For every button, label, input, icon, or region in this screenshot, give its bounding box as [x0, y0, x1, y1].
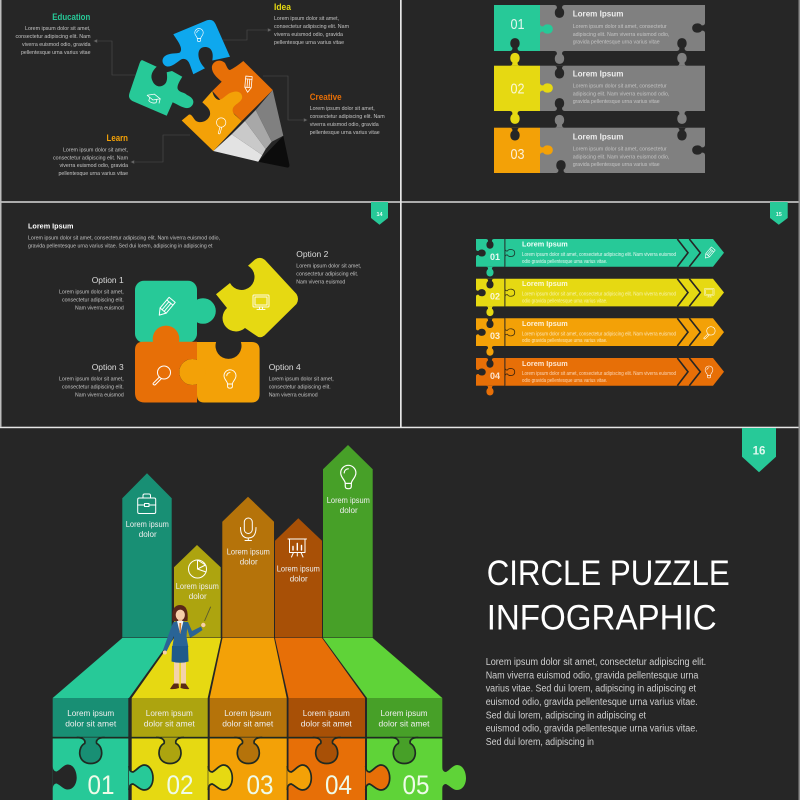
text: idea: consectetur adipiscing elit. Nam — [274, 24, 349, 30]
arrow row 01 — [476, 239, 724, 276]
side knob amber — [287, 765, 311, 790]
arrow row 02 — [476, 279, 724, 316]
icon: microphone — [240, 518, 256, 540]
text: learn: consectetur adipiscing elit. Nam — [53, 156, 128, 162]
text: creative: viverra euismod odio, gravida — [310, 122, 379, 128]
arrow row 01: odio gravida pellentesque urna varius vitae. — [522, 259, 607, 265]
text: education: pellentesque urna varius vitae — [21, 50, 90, 56]
arrow row 02: odio gravida pellentesque urna varius vitae. — [522, 298, 607, 304]
puzzle numbers: 04 — [325, 770, 352, 800]
text: idea: Lorem ipsum dolor sit amet, — [274, 16, 339, 22]
front face labels — [65, 708, 430, 729]
arrow row 03: odio gravida pellentesque urna varius vitae. — [522, 338, 607, 344]
arrow row 04 — [476, 358, 724, 395]
page tag 14: 14 — [376, 212, 383, 218]
arrow labels: dolor — [189, 591, 207, 601]
arrow labels: dolor — [240, 556, 258, 566]
arrow labels: dolor — [340, 505, 358, 515]
icon: lightbulb — [195, 28, 203, 42]
icon: graduation cap — [146, 92, 161, 105]
puzzle piece: orange — [135, 326, 197, 402]
text: learn: pellentesque urna varius vitae — [58, 171, 128, 177]
icon: presentation board — [288, 539, 306, 557]
number 02: 02 — [510, 80, 524, 98]
body paragraph: euismod odio, gravida pellentesque urna varius vitae. — [486, 724, 698, 735]
arrow row 01: Lorem Ipsum — [522, 240, 568, 248]
option 1: Option 1 — [92, 275, 124, 285]
arrow row 01: Lorem ipsum dolor sit amet, consectetur adipiscing elit. Nam viverra euismod — [522, 252, 676, 258]
icon: pencil — [244, 76, 252, 93]
puzzle numbers: 03 — [246, 770, 274, 800]
puzzle numbers: 01 — [88, 770, 114, 800]
puzzle piece: teal — [135, 281, 216, 343]
number 01: 01 — [510, 16, 524, 33]
page tag 14 — [371, 202, 388, 225]
text: row 2: Lorem Ipsum — [573, 69, 623, 78]
arrow labels: Lorem ipsum — [176, 581, 219, 591]
text: row 3 — [573, 132, 670, 168]
puzzle numbers: 02 — [166, 770, 194, 800]
body paragraph: Sed dui lorem, adipiscing in — [486, 737, 594, 748]
arrow row 02: Lorem ipsum dolor sit amet, consectetur adipiscing elit. Nam viverra euismod — [522, 292, 676, 298]
text: row 1: gravida pellentesque urna varius vitae — [573, 40, 660, 46]
title: CIRCLE PUZZLE — [487, 554, 730, 593]
option 1: consectetur adipiscing elit. — [62, 298, 124, 304]
row 2 — [494, 53, 705, 124]
arrow 4 — [275, 518, 322, 638]
panel: numbered puzzle rows — [494, 5, 705, 173]
panel: circle puzzle main slide — [52, 428, 776, 800]
text: education: Lorem ipsum dolor sit amet, — [25, 26, 91, 32]
notch in piece 1 — [53, 764, 77, 790]
arrow row 02: 02 — [490, 292, 500, 302]
page tag 16 — [742, 428, 776, 472]
option 2: consectetur adipiscing elit. — [296, 272, 358, 278]
text: education — [16, 12, 91, 56]
body paragraph: Sed dui lorem, adipiscing in adipiscing et — [486, 710, 646, 721]
text: creative — [310, 92, 385, 136]
top knob 1 — [77, 738, 105, 764]
connector lines — [94, 28, 307, 164]
puzzle numbers: 05 — [402, 770, 430, 800]
number 03: 03 — [510, 146, 524, 163]
title — [487, 554, 730, 637]
text: learn: Learn — [106, 133, 128, 143]
text: row 2: adipiscing elit. Nam viverra euismod odio, — [573, 92, 670, 98]
option 2 — [296, 249, 362, 285]
text: learn — [53, 133, 128, 177]
option 4: consectetur adipiscing elit. — [269, 385, 331, 391]
arrow 2 — [174, 545, 221, 638]
text: row 1: adipiscing elit. Nam viverra euismod odio, — [573, 32, 670, 38]
arrow row 03: Lorem ipsum dolor sit amet, consectetur adipiscing elit. Nam viverra euismod — [522, 331, 676, 337]
text: education: Education — [52, 12, 90, 22]
text: row 2: Lorem ipsum dolor sit amet, consectetur — [573, 84, 667, 90]
option 1 — [59, 275, 124, 311]
text: idea: Idea — [274, 2, 292, 12]
side knob yellow — [208, 765, 232, 790]
option 3: consectetur adipiscing elit. — [62, 385, 124, 391]
text: idea: viverra euismod odio, gravida — [274, 32, 343, 38]
arrow labels: Lorem ipsum — [277, 564, 320, 574]
puzzle base pieces — [52, 737, 466, 800]
arrow row 04: Lorem Ipsum — [522, 359, 568, 368]
side knob orange — [366, 765, 390, 790]
text: row 3: adipiscing elit. Nam viverra euismod odio, — [573, 154, 670, 160]
option 2: Nam viverra euismod — [296, 279, 345, 285]
text: row 3: Lorem ipsum dolor sit amet, consectetur — [573, 146, 667, 152]
arrow row 02: Lorem Ipsum — [522, 279, 568, 288]
text: idea: pellentesque urna varius vitae — [274, 40, 344, 46]
arrow labels: dolor — [139, 529, 157, 539]
option 3 — [59, 362, 124, 398]
text: row 1: Lorem Ipsum — [573, 10, 623, 19]
panel: arrow rows — [476, 202, 788, 395]
arrow row 04: Lorem ipsum dolor sit amet, consectetur adipiscing elit. Nam viverra euismod — [522, 371, 676, 377]
front face labels: dolor sit amet — [65, 719, 117, 729]
arrow 3 — [222, 497, 274, 638]
text: creative: consectetur adipiscing elit. Nam — [310, 114, 385, 120]
arrow row 04: 04 — [490, 371, 500, 381]
panel: pencil puzzle — [16, 2, 385, 177]
icon: monitor — [253, 295, 269, 310]
text: row 2: gravida pellentesque urna varius vitae — [573, 99, 660, 105]
body paragraph: Nam viverra euismod odio, gravida pellentesque urna — [486, 670, 699, 681]
option 3: Nam viverra euismod — [75, 392, 124, 398]
heading and intro text — [28, 222, 220, 250]
text: creative: Creative — [310, 92, 342, 102]
arrow row 03: Lorem Ipsum — [522, 319, 568, 328]
text: learn: Lorem ipsum dolor sit amet, — [63, 148, 128, 154]
icon: lightbulb — [341, 465, 356, 489]
text: education: consectetur adipiscing elit. Nam — [16, 34, 91, 40]
heading and intro text: gravida pellentesque urna varius vitae. Sed dui lorem, adipiscing in adipiscing et — [28, 244, 213, 250]
option 4: Option 4 — [269, 362, 301, 372]
option 2: Lorem ipsum dolor sit amet, — [296, 264, 362, 270]
icon: magnifier — [212, 116, 230, 134]
side knob teal — [129, 765, 153, 790]
puzzle piece: orange creative — [212, 61, 273, 121]
option 1: Nam viverra euismod — [75, 305, 124, 311]
floor strips — [53, 638, 442, 698]
body paragraph — [486, 657, 706, 748]
top knob 3 — [234, 738, 262, 764]
arrow labels — [126, 495, 370, 601]
page tag 15 — [770, 202, 788, 225]
heading and intro text: Lorem Ipsum — [28, 222, 74, 231]
front face labels: Lorem ipsum — [380, 708, 428, 718]
text: row 3: gravida pellentesque urna varius vitae — [573, 162, 660, 168]
text: row 1: Lorem ipsum dolor sit amet, consectetur — [573, 24, 667, 30]
option 2: Option 2 — [296, 249, 329, 259]
arrow row 03: 03 — [490, 331, 500, 341]
arrow row 01: 01 — [490, 252, 500, 262]
arrow row 04: odio gravida pellentesque urna varius vitae. — [522, 378, 607, 384]
top knob 4 — [313, 738, 341, 764]
text: creative: pellentesque urna varius vitae — [310, 130, 380, 136]
puzzle piece: blue idea — [163, 20, 230, 74]
arrow labels: Lorem ipsum — [126, 519, 169, 529]
front face labels: dolor sit amet — [301, 719, 352, 729]
body paragraph: Lorem ipsum dolor sit amet, consectetur adipiscing elit. — [486, 657, 706, 668]
arrow 5 — [323, 445, 373, 638]
puzzle piece: amber — [179, 342, 260, 402]
icon: briefcase — [138, 494, 156, 514]
front face labels: dolor sit amet — [222, 719, 274, 729]
arrow row 03 — [476, 318, 724, 356]
top knob 2 — [156, 738, 184, 764]
front face labels: Lorem ipsum — [146, 708, 193, 718]
arrow labels: dolor — [290, 574, 308, 584]
page tag 15: 15 — [776, 212, 782, 218]
text: row 3: Lorem Ipsum — [573, 132, 623, 141]
row 3 — [494, 115, 705, 173]
text: learn: viverra euismod odio, gravida — [60, 163, 128, 169]
text: education: viverra euismod odio, gravida — [22, 42, 90, 48]
text: creative: Lorem ipsum dolor sit amet, — [310, 106, 375, 112]
option 3: Lorem ipsum dolor sit amet, — [59, 377, 124, 383]
text: row 1 — [573, 10, 670, 46]
top knob 5 — [390, 738, 418, 764]
front faces — [53, 698, 442, 738]
option 4 — [269, 362, 334, 398]
arrow labels: Lorem ipsum — [227, 546, 270, 556]
option 1: Lorem ipsum dolor sit amet, — [59, 290, 124, 296]
title: INFOGRAPHIC — [487, 598, 717, 637]
arrow 1 — [122, 473, 172, 638]
figure: presenter woman — [163, 605, 211, 689]
front face labels: Lorem ipsum — [224, 708, 271, 718]
front face labels: dolor sit amet — [378, 719, 430, 729]
row 1 — [494, 5, 705, 64]
body paragraph: euismod odio, gravida pellentesque urna varius vitae. — [486, 697, 698, 708]
icon: lightbulb — [224, 370, 236, 388]
panel: four piece puzzle — [28, 202, 388, 402]
puzzle piece: amber learn — [182, 91, 242, 151]
option 4: Lorem ipsum dolor sit amet, — [269, 377, 334, 383]
text: row 2 — [573, 69, 670, 105]
side knob green — [442, 765, 466, 790]
pencil body stripes and tip — [213, 90, 290, 168]
front face labels: dolor sit amet — [144, 719, 195, 729]
puzzle piece: teal education — [129, 60, 193, 116]
puzzle piece: yellow — [216, 258, 298, 337]
icon: pie chart — [188, 560, 206, 578]
option 3: Option 3 — [92, 362, 124, 372]
text: idea — [274, 2, 349, 46]
icon: pencil — [156, 297, 175, 318]
heading and intro text: Lorem ipsum dolor sit amet, consectetur adipiscing elit. Nam viverra euismod odio, — [28, 236, 220, 242]
arrow labels: Lorem ipsum — [327, 495, 370, 505]
front face labels: Lorem ipsum — [303, 708, 350, 718]
icon: magnifier — [153, 366, 170, 385]
front face labels: Lorem ipsum — [67, 708, 114, 718]
body paragraph: varius vitae. Sed dui lorem, adipiscing in adipiscing et — [486, 684, 696, 695]
puzzle numbers — [88, 770, 430, 800]
option 4: Nam viverra euismod — [269, 392, 318, 398]
page tag 16: 16 — [753, 446, 765, 458]
